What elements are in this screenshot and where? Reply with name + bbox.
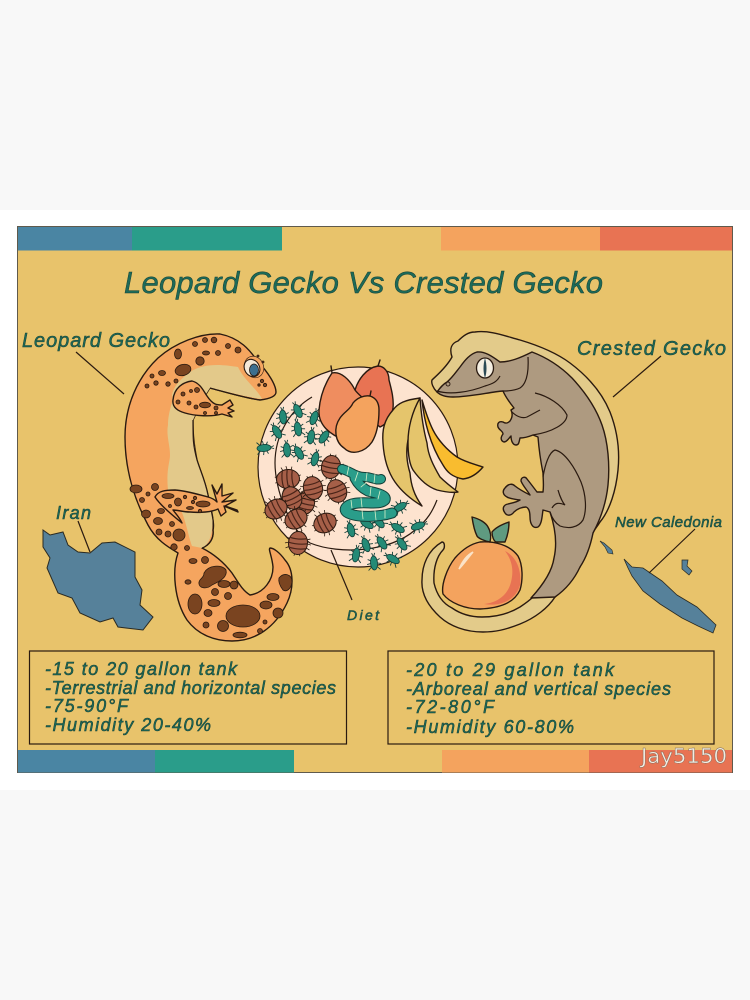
- top colour stripe: [18, 227, 732, 250]
- body: [125, 334, 292, 641]
- map: New Caledonia: New Caledonia: [615, 514, 722, 531]
- plate: [258, 367, 458, 567]
- map: Iran: [43, 503, 153, 630]
- eye: [476, 358, 494, 378]
- facts box: leopard gecko: -75-90°F: [45, 696, 129, 716]
- facts box: crested gecko: -72-80°F: [406, 697, 495, 717]
- bottom colour stripe: [18, 750, 732, 772]
- facts box: leopard gecko: -Terrestrial and horizontal species: [45, 678, 336, 698]
- facts box: crested gecko: -Humidity 60-80%: [406, 717, 574, 737]
- worms: [342, 466, 392, 520]
- label: Leopard Gecko: Leopard Gecko: [22, 330, 170, 352]
- facts box: leopard gecko: [30, 651, 346, 744]
- facts box: leopard gecko: -15 to 20 gallon tank: [45, 659, 238, 679]
- crested gecko illustration: [422, 332, 619, 632]
- roaches: [258, 452, 354, 557]
- label: Diet: [331, 550, 380, 623]
- label: Diet: Diet: [347, 607, 380, 623]
- mango slices: [383, 398, 483, 506]
- facts box: leopard gecko: -Humidity 20-40%: [45, 715, 211, 735]
- eye and head spots: [241, 353, 267, 387]
- poster panel: [18, 226, 732, 772]
- cream underside: [167, 365, 262, 548]
- map: New Caledonia: [600, 514, 722, 633]
- white backing band: [0, 210, 750, 790]
- front leg: [173, 381, 234, 417]
- facts box: crested gecko: -20 to 29 gallon tank: [406, 660, 615, 680]
- peach: [443, 517, 522, 609]
- label: Leopard Gecko: [22, 330, 170, 394]
- map: Iran: Iran: [56, 503, 91, 523]
- facts box: crested gecko: [388, 651, 714, 744]
- leaves: [472, 517, 509, 542]
- cream crest, back and tail: [422, 332, 619, 632]
- title: Leopard Gecko Vs Crested Gecko: [124, 265, 603, 300]
- diet plate: [256, 360, 483, 571]
- pears: [319, 360, 393, 452]
- label: Crested Gecko: [577, 338, 726, 397]
- back leg: [155, 484, 238, 523]
- facts box: crested gecko: -Arboreal and vertical species: [406, 679, 671, 699]
- label: Crested Gecko: Crested Gecko: [577, 338, 726, 360]
- crickets: [256, 399, 430, 571]
- watermark: Jay5150: [639, 744, 727, 768]
- leopard gecko illustration: [125, 334, 292, 641]
- body contour lines: [437, 357, 585, 528]
- body: [437, 352, 609, 598]
- spots: [130, 337, 292, 638]
